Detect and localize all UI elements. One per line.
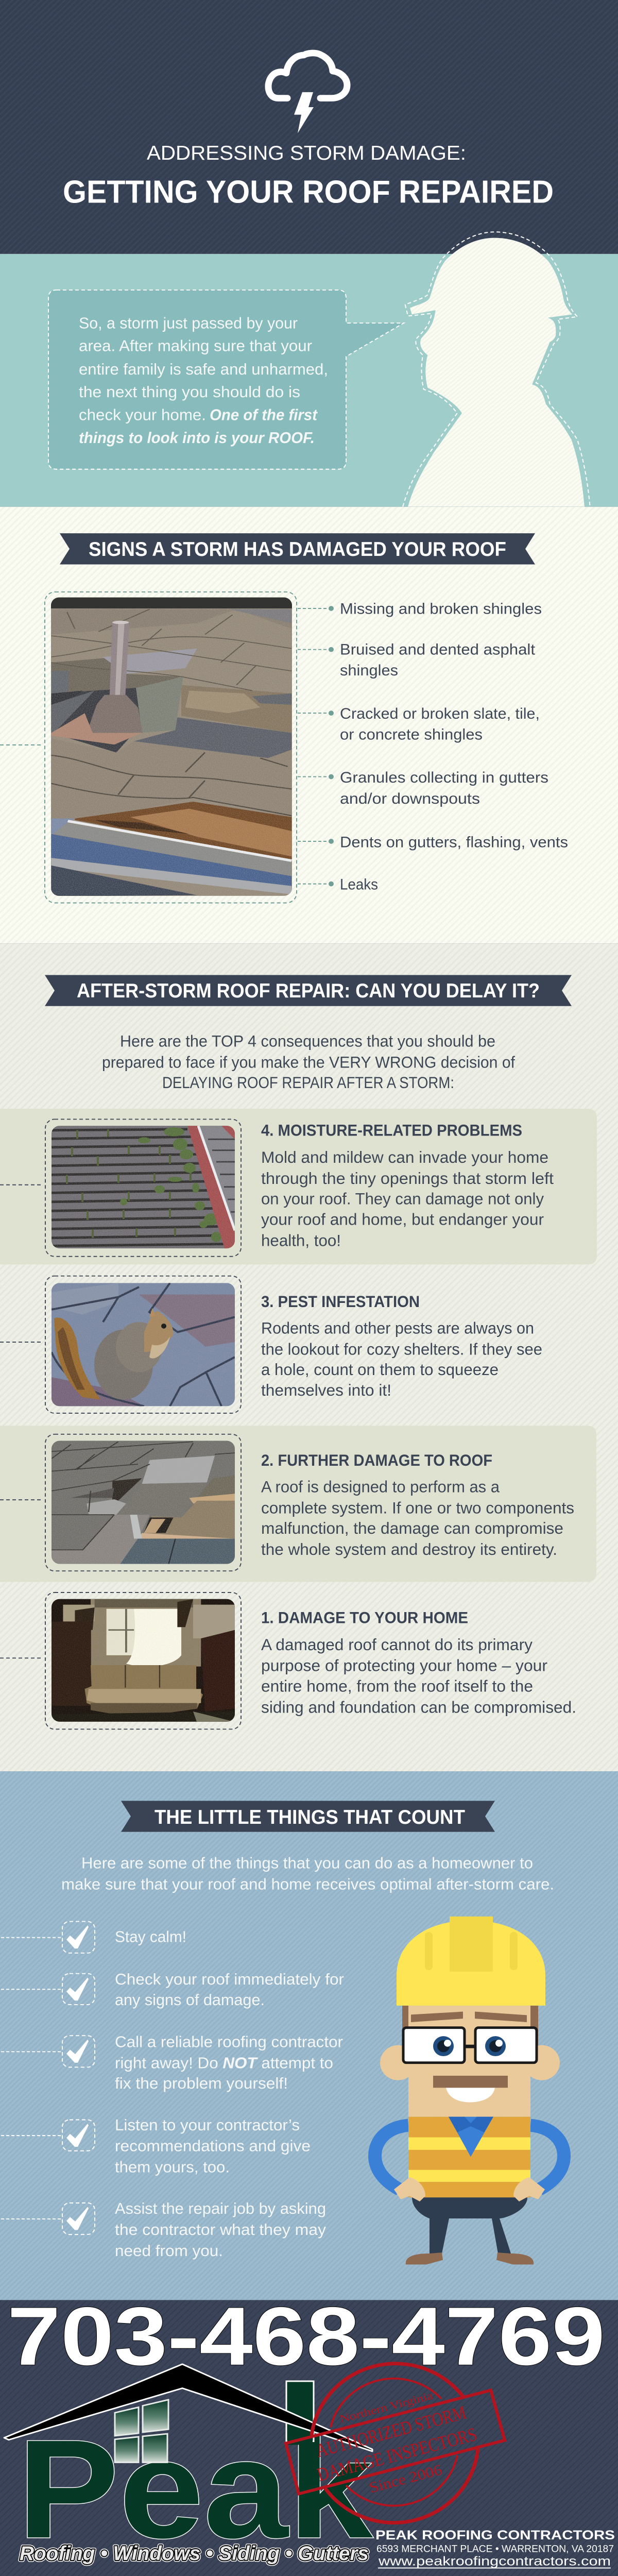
checklist item 4 — [1, 2116, 311, 2176]
list: signs of storm damage: Granules collecting in gutters — [340, 770, 548, 786]
checklist item 3: fix the problem yourself! — [115, 2075, 288, 2092]
panel: item 2 further damage — [0, 1426, 596, 1582]
dashed photo frame — [45, 592, 297, 903]
panel: item 3 pests: 3. PEST INFESTATION — [261, 1292, 420, 1311]
panel: signs of damage background — [0, 507, 618, 943]
panel: item 4 moisture: health, too! — [261, 1231, 341, 1249]
checklist item 5: need from you. — [115, 2242, 223, 2260]
panel: item 4 moisture — [0, 1109, 597, 1264]
photo: mossy shingles — [52, 1126, 235, 1248]
panel: intro teal background — [0, 254, 618, 507]
panel: item 3 pests — [0, 1276, 542, 1413]
panel: item 1 home damage: 1. DAMAGE TO YOUR HOME — [261, 1608, 468, 1626]
panel: item 4 moisture: Mold and mildew can invade your home — [261, 1148, 548, 1166]
panel: item 1 home damage: A damaged roof cannot do its primary — [261, 1635, 533, 1654]
list: signs of storm damage: Leaks — [340, 876, 378, 893]
list: signs of storm damage: Missing and broken shingles — [340, 601, 542, 618]
logo: window — [115, 2400, 168, 2462]
callout: speech bubble: area. After making sure that your — [79, 337, 312, 354]
callout: speech bubble: the next thing you should do is — [79, 383, 300, 401]
legs and shoes — [406, 2197, 534, 2264]
list: signs of storm damage: shingles — [340, 663, 398, 679]
panel: little things background — [0, 1771, 618, 2300]
panel: item 4 moisture: through the tiny openings that storm left — [261, 1169, 554, 1188]
logo tagline: Roofing • Windows • Siding • Gutters — [20, 2542, 369, 2565]
panel: item 1 home damage: entire home, from the roof itself to the — [261, 1677, 533, 1695]
panel: footer background — [0, 2300, 618, 2576]
photo: damaged shingle roof — [51, 598, 292, 896]
banner heading: little things: THE LITTLE THINGS THAT COUNT — [154, 1806, 465, 1828]
list: signs of storm damage — [298, 601, 568, 893]
intro text: delay: Here are the TOP 4 consequences that you should be — [120, 1032, 495, 1050]
list: signs of storm damage: and/or downspouts — [340, 790, 480, 807]
checklist item 5 — [1, 2200, 327, 2260]
banner heading: delay — [45, 975, 572, 1006]
panel: item 3 pests: a hole, count on them to squeeze — [261, 1361, 499, 1379]
logo: tall k stem — [286, 2381, 314, 2445]
checklist item 3 — [1, 2033, 343, 2092]
logo: roof chevron — [4, 2364, 372, 2451]
list: signs of storm damage: Cracked or broken slate, tile, — [340, 705, 540, 722]
list: signs of storm damage: Bruised and dented asphalt — [340, 641, 535, 658]
stamp: authorized storm damage inspectors: Northern Virginia — [338, 2389, 434, 2425]
callout: speech bubble: So, a storm just passed by your — [79, 315, 298, 332]
hands — [394, 2177, 545, 2201]
checklist item 2 — [1, 1971, 344, 2009]
logo: Peak Roofing — [4, 2364, 374, 2567]
photo: broken slate roof — [52, 1440, 235, 1564]
panel: header background — [0, 0, 618, 254]
hard hat — [397, 1917, 545, 2006]
contact details: www.peakroofingcontractors.com — [378, 2554, 611, 2569]
checklist item 4: recommendations and give — [115, 2138, 311, 2155]
intro text: little things: Here are some of the things that you can do as a homeowner to — [81, 1855, 533, 1872]
checklist item 4: them yours, too. — [115, 2159, 230, 2176]
checklist item 2: Check your roof immediately for — [115, 1971, 344, 1988]
icon: storm cloud with lightning bolt — [268, 53, 347, 133]
illustration: cartoon roofer — [375, 1917, 564, 2264]
contact details: PEAK ROOFING CONTRACTORS — [375, 2528, 615, 2543]
photo: squirrel on roof — [52, 1283, 235, 1406]
panel: item 3 pests: Rodents and other pests are always on — [261, 1319, 534, 1337]
panel: item 2 further damage: complete system. If one or two components — [261, 1499, 574, 1517]
panel: item 2 further damage: the whole system and destroy its entirety. — [261, 1540, 557, 1558]
banner heading: signs: SIGNS A STORM HAS DAMAGED YOUR ROOF — [89, 538, 506, 561]
panel: item 3 pests: themselves into it! — [261, 1381, 391, 1399]
stamp: authorized storm damage inspectors: AUTHORIZED STORM — [314, 2402, 469, 2462]
callout: speech bubble: One of the first — [210, 406, 318, 423]
callout: speech bubble: check your home. — [79, 406, 206, 423]
panel: delay section background — [0, 943, 618, 1772]
vest and tie — [408, 2117, 530, 2197]
callout: speech bubble: things to look into is your ROOF. — [79, 430, 315, 447]
stamp: authorized storm damage inspectors: DAMAGE INSPECTORS — [315, 2424, 479, 2486]
list: signs of storm damage: or concrete shingles — [340, 726, 483, 743]
panel: item 2 further damage: malfunction, the damage can compromise — [261, 1519, 563, 1537]
panel: item 1 home damage: purpose of protecting your home – your — [261, 1656, 547, 1674]
panel: item 4 moisture: 4. MOISTURE-RELATED PROBLEMS — [261, 1121, 522, 1139]
title line 1: ADDRESSING STORM DAMAGE: — [147, 142, 466, 164]
photo: damaged living room — [52, 1599, 235, 1723]
checklist item 5: Assist the repair job by asking — [115, 2200, 326, 2217]
stamp: authorized storm damage inspectors — [286, 2364, 505, 2523]
checklist item 4: Listen to your contractor’s — [115, 2116, 300, 2134]
intro text: delay — [102, 1032, 515, 1092]
contact details: 6593 MERCHANT PLACE • WARRENTON, VA 20187 — [376, 2544, 614, 2554]
banner heading: little things — [121, 1801, 495, 1832]
checklist item 5: the contractor what they may — [115, 2221, 327, 2239]
checklist item 1: Stay calm! — [115, 1928, 186, 1945]
checklist item 2: any signs of damage. — [115, 1991, 265, 2009]
list: signs of storm damage: Dents on gutters, flashing, vents — [340, 834, 568, 851]
logo wordmark: Peak — [18, 2411, 374, 2567]
glasses and eyes — [403, 2028, 537, 2063]
checklist item 3: Call a reliable roofing contractor — [115, 2033, 343, 2050]
panel: item 3 pests: the lookout for cozy shelters. If they see — [261, 1340, 542, 1358]
intro text: little things: make sure that your roof and home receives optimal after-storm care. — [61, 1876, 554, 1893]
panel: item 2 further damage: 2. FURTHER DAMAGE TO ROOF — [261, 1451, 492, 1469]
intro text: little things — [61, 1855, 554, 1893]
arms — [375, 2125, 564, 2190]
contact details — [375, 2528, 615, 2569]
banner heading: delay: AFTER-STORM ROOF REPAIR: CAN YOU DELAY IT? — [77, 980, 540, 1002]
stamp: authorized storm damage inspectors: Since 2006 — [367, 2462, 444, 2496]
phone number: 703-468-4769 — [7, 2291, 605, 2382]
banner heading: signs — [60, 533, 535, 564]
illustration: worker silhouette — [403, 232, 590, 506]
callout: speech bubble — [48, 290, 404, 469]
logo tagline: Roofing • Windows • Siding • Gutters — [20, 2542, 369, 2565]
panel: item 1 home damage: siding and foundation can be compromised. — [261, 1698, 576, 1716]
title line 2: GETTING YOUR ROOF REPAIRED — [63, 174, 554, 210]
panel: item 1 home damage — [0, 1592, 576, 1729]
checklist item 1 — [1, 1922, 186, 1953]
panel: item 4 moisture: your roof and home, but endanger your — [261, 1210, 544, 1228]
face — [380, 2006, 560, 2117]
intro text: delay: prepared to face if you make the VERY WRONG decision of — [102, 1053, 515, 1071]
panel: item 2 further damage: A roof is designed to perform as a — [261, 1478, 500, 1496]
callout: speech bubble: entire family is safe and unharmed, — [79, 361, 328, 378]
panel: item 4 moisture: on your roof. They can damage not only — [261, 1190, 544, 1208]
checklist item 3: right away! Do NOT attempt to — [115, 2055, 333, 2072]
logo tagline: Roofing • Windows • Siding • Gutters — [20, 2542, 369, 2565]
intro text: delay: DELAYING ROOF REPAIR AFTER A STORM: — [162, 1074, 454, 1092]
connector: left dashes — [0, 744, 43, 745]
